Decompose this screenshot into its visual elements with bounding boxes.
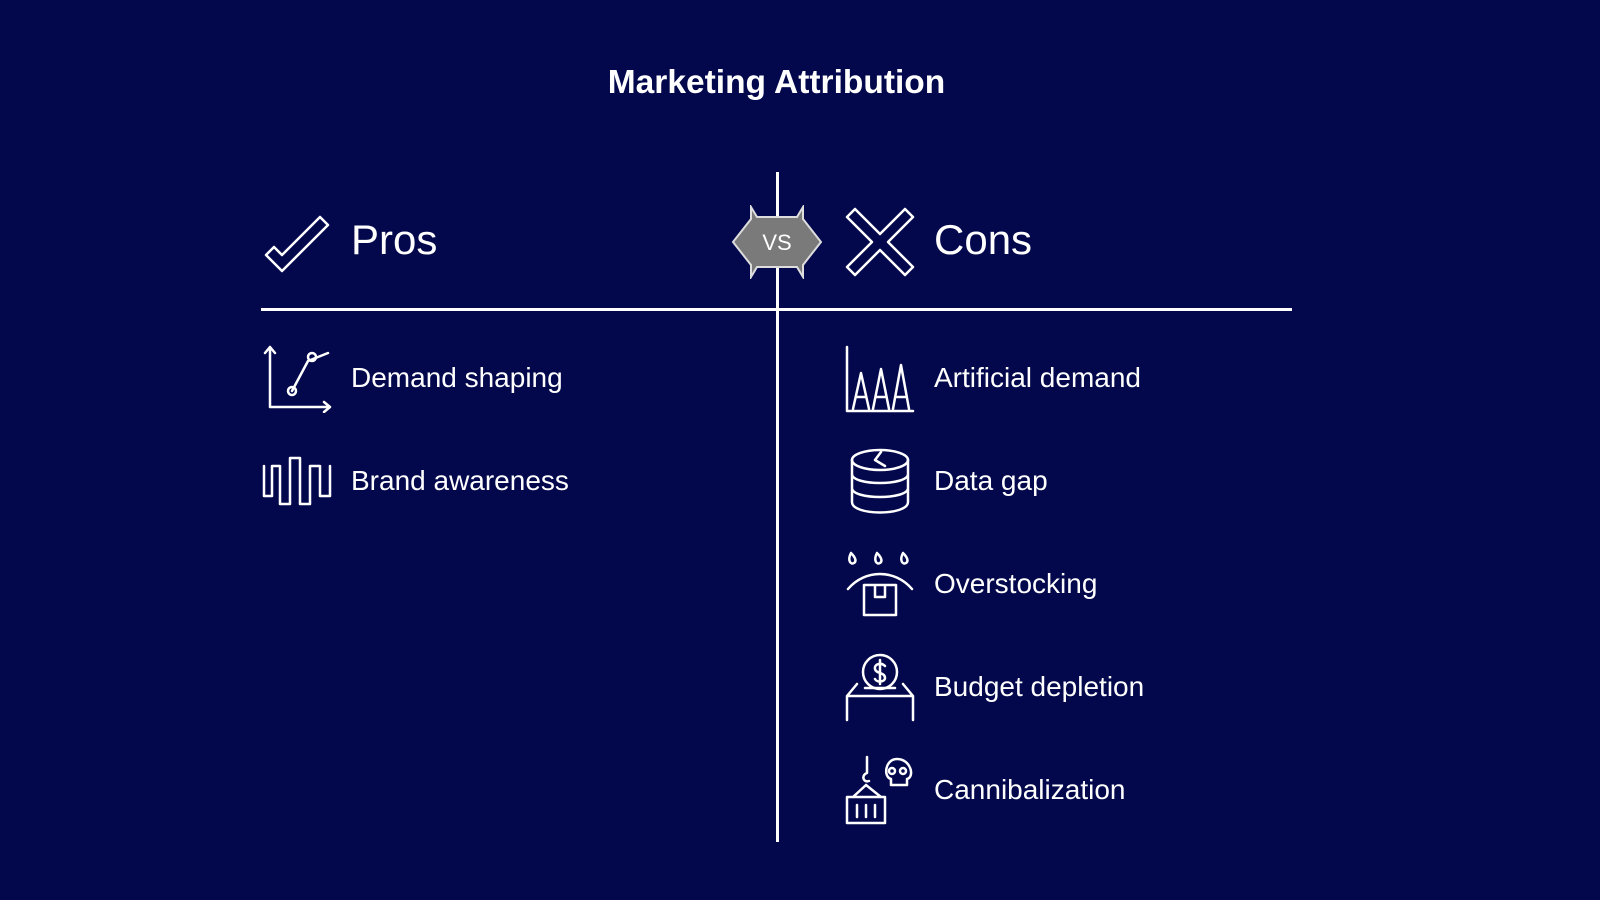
icon: coin into box — [846, 654, 914, 722]
con item: data gap — [850, 448, 1048, 514]
con item: budget depletion: Budget depletion — [934, 671, 1144, 702]
con item: data gap: Data gap — [934, 465, 1048, 496]
con item: overstocking — [846, 552, 1097, 616]
horizontal divider — [261, 308, 1292, 311]
icon: peaks — [846, 346, 914, 412]
heading: cons: Cons — [934, 216, 1032, 263]
icon: check — [264, 216, 330, 272]
icon: chart — [264, 346, 332, 413]
title: Marketing Attribution — [608, 64, 945, 101]
icon: database — [850, 448, 910, 514]
con item: artificial demand: Artificial demand — [934, 362, 1141, 393]
con item: budget depletion — [846, 654, 1144, 722]
icon: x — [846, 208, 914, 276]
con item: cannibalization — [846, 756, 1125, 824]
icon: crate and skull — [846, 756, 912, 824]
con item: artificial demand — [846, 346, 1141, 412]
pro item: demand shaping: Demand shaping — [351, 362, 563, 393]
vs badge — [732, 205, 822, 279]
pro item: brand awareness: Brand awareness — [351, 465, 569, 496]
con item: cannibalization: Cannibalization — [934, 774, 1125, 805]
heading: pros: Pros — [351, 216, 437, 263]
vs badge: VS — [762, 230, 792, 255]
icon: wave — [262, 456, 332, 506]
icon: box with drops — [846, 552, 914, 616]
pro item: demand shaping — [264, 346, 563, 413]
vertical divider — [776, 172, 779, 842]
pro item: brand awareness — [262, 456, 569, 506]
con item: overstocking: Overstocking — [934, 568, 1097, 599]
